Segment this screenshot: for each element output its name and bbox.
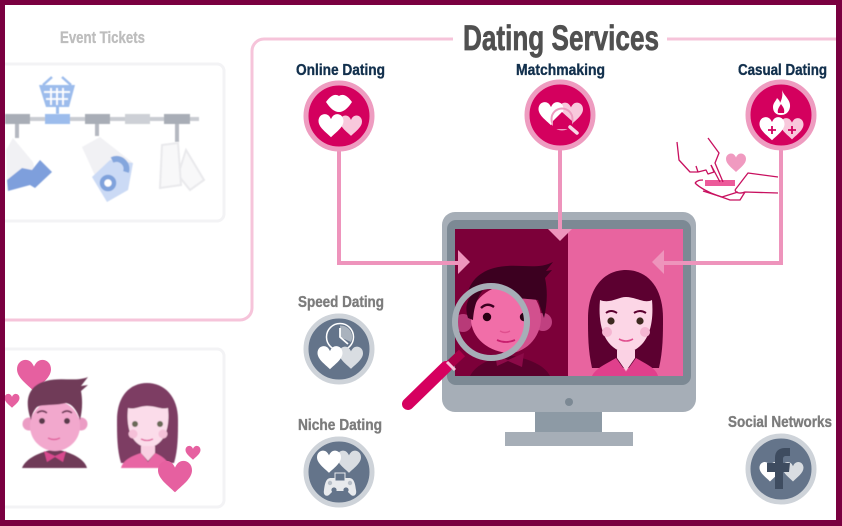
screen left xyxy=(455,229,568,376)
monitor body xyxy=(442,212,696,412)
icon: light heart xyxy=(559,103,583,125)
icon disc: speed dating xyxy=(306,316,372,382)
panel: couple card (faded) xyxy=(0,349,224,507)
icon: light heart xyxy=(340,116,362,136)
icon: rail with hangers xyxy=(5,114,199,142)
icon: shopping basket xyxy=(39,77,75,114)
icon: heart small left xyxy=(4,394,20,408)
icon: white heart xyxy=(538,102,564,125)
label: casual dating: Casual Dating xyxy=(738,62,827,79)
magnifier handle xyxy=(408,353,462,404)
panel frame: dating services outline xyxy=(5,39,836,320)
label: online dating: Online Dating xyxy=(296,62,385,79)
lens ring xyxy=(455,286,527,358)
monitor stand xyxy=(505,410,633,446)
node: social networks xyxy=(728,414,832,502)
figure: boy xyxy=(22,377,88,468)
icon: light heart xyxy=(339,347,363,369)
icon: white heart xyxy=(318,114,344,137)
node: online dating xyxy=(296,62,385,149)
heading: event tickets: Event Tickets xyxy=(60,29,145,47)
icon: flame xyxy=(773,90,790,115)
connector: matchmaking to screen xyxy=(548,150,572,241)
figure: boy on screen xyxy=(468,262,553,376)
label: matchmaking: Matchmaking xyxy=(516,62,605,79)
illustration: hands exchanging a heart xyxy=(677,138,778,200)
node: casual dating xyxy=(738,62,827,148)
icon: white heart xyxy=(317,451,341,473)
figure: girl xyxy=(117,383,178,468)
icon: light heart xyxy=(782,462,804,481)
icon: light heart xyxy=(337,451,361,473)
card in hand xyxy=(705,180,735,186)
figure: girl on screen xyxy=(588,270,663,376)
icon: ticket three xyxy=(160,143,204,190)
label: niche dating: Niche Dating xyxy=(298,417,382,434)
icon: clock xyxy=(326,324,354,350)
icon: heart top left xyxy=(17,360,51,391)
icon: ticket two xyxy=(82,137,133,202)
icon: game controller xyxy=(324,473,356,496)
label: speed dating: Speed Dating xyxy=(298,294,384,311)
connector: casual dating to screen xyxy=(652,150,781,274)
magnifier over boy xyxy=(408,282,551,404)
icon: ticket one xyxy=(6,138,52,191)
node: speed dating xyxy=(298,294,384,382)
icon disc: niche dating xyxy=(306,439,372,505)
icon: heart bottom right xyxy=(158,461,192,492)
icon: lips xyxy=(326,95,352,112)
icon: magnifier xyxy=(552,108,577,133)
icon: floating heart xyxy=(726,154,746,172)
icon: white heart xyxy=(760,117,784,140)
icon disc: matchmaking xyxy=(527,82,593,148)
screen right xyxy=(568,229,683,376)
icon: white heart xyxy=(318,346,342,369)
couple card outline xyxy=(0,349,224,507)
hand outlines xyxy=(677,138,778,200)
monitor bezel xyxy=(447,220,691,385)
magnified face xyxy=(458,289,524,355)
icon disc: social networks xyxy=(748,436,814,502)
icon disc: online dating xyxy=(306,83,372,149)
icon: plus marks xyxy=(768,126,796,134)
panel: event tickets (faded) xyxy=(0,29,224,221)
icon: heart small right xyxy=(186,446,200,460)
event tickets card xyxy=(0,64,224,221)
node: matchmaking xyxy=(516,62,605,148)
icon: light heart xyxy=(780,118,804,139)
icon: facebook f xyxy=(767,448,790,489)
connector: online dating to screen xyxy=(339,150,470,274)
icon: white heart xyxy=(760,462,780,481)
title: Dating Services xyxy=(463,19,659,58)
icon disc: casual dating xyxy=(748,82,814,148)
power button xyxy=(565,398,573,406)
monitor xyxy=(408,212,696,446)
node: niche dating xyxy=(298,417,382,505)
